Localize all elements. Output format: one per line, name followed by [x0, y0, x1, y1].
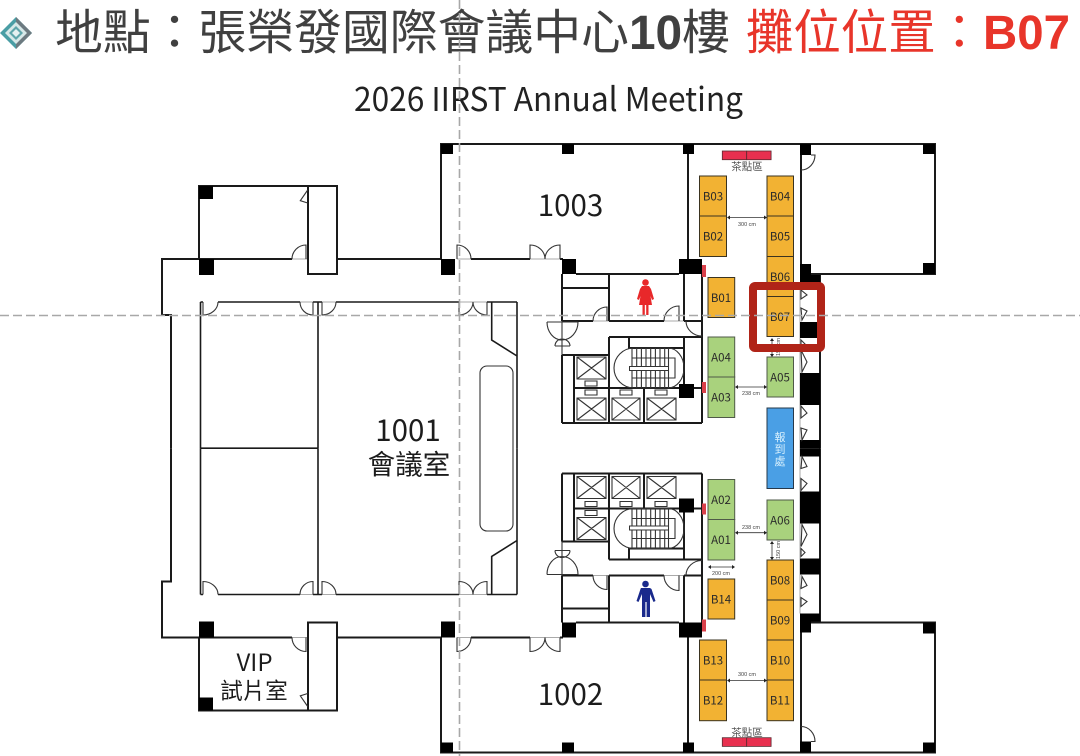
registration desk: 報: [774, 429, 786, 445]
booths: A series: [708, 337, 794, 560]
booths: B series: B07: [770, 309, 790, 325]
booths: B series: B11: [770, 692, 790, 708]
booths: B series: B10: [770, 652, 790, 668]
booths: B series: B12: [703, 692, 723, 708]
label: room 1001 meeting room: [368, 408, 450, 482]
screen: rounded stage element: [480, 366, 513, 531]
tea area: top: 茶點區: [731, 159, 763, 174]
dimension arrows: 150 cm: [776, 338, 782, 356]
dimension arrows: 238 cm: [742, 525, 760, 531]
header: venue and booth location: [0, 0, 1070, 63]
booths: B series: B02: [703, 228, 723, 244]
dimension arrows: 200 cm: [712, 571, 730, 577]
floor plan: walls and rooms: [162, 144, 935, 752]
callout: highlighted booth B07: [753, 286, 821, 348]
icon: women's restroom: [637, 279, 654, 315]
dimension arrows: [708, 216, 782, 682]
booths: B series: B14: [711, 592, 732, 608]
booths: B series: [700, 176, 794, 721]
booths: A series: A01: [711, 532, 731, 548]
small red signs: [702, 265, 706, 393]
booths: A series: A05: [770, 370, 790, 386]
booths: B series: B06: [770, 269, 790, 285]
booths: B series: B13: [703, 652, 723, 668]
booths: B series: B05: [770, 228, 790, 244]
booths: A series: A06: [770, 512, 790, 528]
tea area: bottom: 茶點區: [731, 725, 763, 740]
tea area: top: [722, 151, 771, 174]
registration desk: [767, 408, 794, 488]
upper half of building: [162, 144, 935, 448]
dimension arrows: 238 cm: [742, 391, 760, 397]
label: room 1003: 1003: [538, 183, 603, 225]
label: room 1002: 1002: [538, 672, 603, 714]
booths: B series: B01: [711, 290, 731, 306]
booths: A series: A02: [711, 492, 731, 508]
booths: B series: B03: [703, 188, 723, 204]
dimension arrows: 300 cm: [738, 672, 756, 678]
tea area: bottom: [722, 725, 771, 746]
lower half of building: [162, 448, 935, 752]
title: event name: 2026 IIRST Annual Meeting: [354, 73, 743, 121]
label: VIP preview room: VIP: [236, 643, 273, 678]
booths: B series: B09: [770, 612, 790, 628]
label: room 1001 meeting room: 1001: [375, 408, 441, 450]
dimension arrows: 300 cm: [738, 222, 756, 228]
label: VIP preview room: 試片室: [220, 674, 288, 706]
elevators: [577, 357, 676, 420]
registration desk: 到: [774, 441, 786, 457]
room labels: [220, 183, 603, 714]
label: VIP preview room: [220, 643, 288, 706]
label: room 1001 meeting room: 會議室: [368, 442, 450, 482]
booths: A series: A03: [711, 390, 731, 406]
booths: A series: A04: [711, 350, 731, 366]
icon: men's restroom: [636, 581, 656, 617]
registration desk: 處: [774, 453, 786, 469]
booths: B series: B08: [770, 572, 790, 588]
icon: teal diamond bullet: [0, 17, 32, 49]
stairs: [614, 348, 684, 388]
doors: [203, 155, 815, 355]
booths: B series: B04: [770, 188, 791, 204]
dimension arrows: 150 cm: [776, 541, 782, 559]
